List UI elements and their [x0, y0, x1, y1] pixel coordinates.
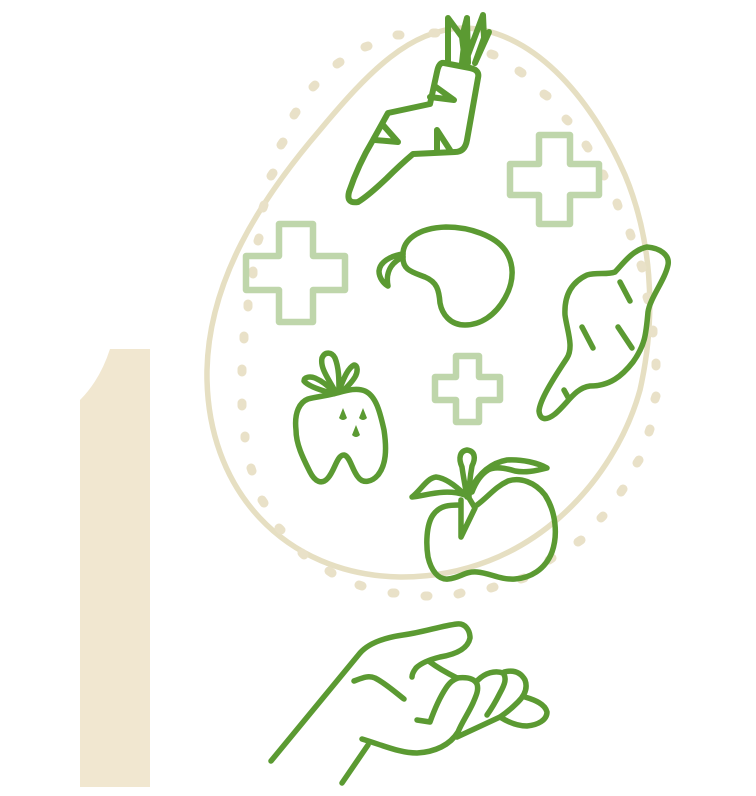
icon: plus top right — [510, 135, 599, 224]
egg outline — [207, 28, 650, 577]
dotted egg outline — [242, 33, 656, 596]
icon: bean — [379, 227, 512, 325]
icon: radish face dots — [339, 408, 367, 437]
icon: large plus left — [246, 224, 345, 322]
icon: sweet potato — [539, 247, 668, 419]
numeral one — [80, 349, 150, 787]
icon: tomato — [412, 450, 555, 579]
icon: small plus centre — [435, 356, 500, 422]
icon: radish tooth — [296, 353, 386, 482]
icon: carrot — [348, 15, 489, 202]
icon: hand — [271, 624, 547, 783]
